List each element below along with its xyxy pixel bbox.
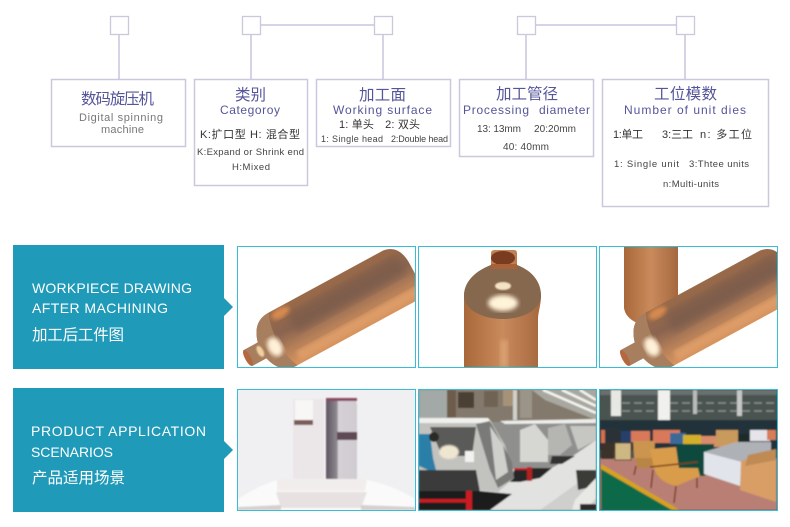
side table and cream box (601, 443, 614, 459)
text: unit codes: n: 多工位 (700, 127, 752, 141)
text: unit codes in English: 3:Thtee units (689, 159, 749, 170)
node square 3 (374, 16, 392, 34)
text: unit codes: 3:三工 (662, 129, 693, 141)
panel: working surface (316, 80, 450, 146)
subheading: Number of unit dies: Number of unit dies (624, 103, 746, 117)
tan sofa (740, 458, 776, 502)
heading: processing diameter: 加工管径 (496, 85, 558, 103)
far cars (500, 420, 596, 470)
near car (419, 418, 514, 492)
text: unit codes in English: 1: Single unit (614, 159, 679, 170)
text: product application scenarios: PRODUCT APPLICATION (31, 423, 206, 439)
image: two copper tubes (599, 246, 778, 368)
subheading: Processing diameter (463, 103, 590, 117)
text: machine name in English: machine (101, 124, 144, 136)
text: unit codes (613, 127, 752, 141)
heading: machine name: 数码旋压机 (81, 90, 154, 108)
image: air conditioners (238, 390, 416, 510)
panel: workpiece drawing label (13, 245, 233, 369)
white sofa (702, 448, 742, 487)
node square 4 (518, 16, 536, 34)
panel: processing diameter (460, 80, 594, 156)
armchair one (633, 441, 655, 458)
text: unit codes in English (614, 159, 749, 190)
text: product application in Chinese: 产品适用场景 (32, 469, 125, 487)
text: product application scenarios (31, 423, 206, 460)
text: workpiece drawing in Chinese: 加工后工件图 (32, 326, 124, 344)
text: diameter values: 13: 13mm (477, 124, 521, 135)
subheading: Processing diameter: Processing (463, 103, 529, 117)
text: head codes in English: 1: Single head (321, 134, 383, 144)
heading: number of unit dies: 工位模数 (654, 85, 717, 103)
text: unit codes: 1:单工 (613, 128, 643, 141)
image: copper tube angled (237, 246, 416, 368)
node square 5 (676, 16, 694, 34)
foreground shadow and red stands (419, 491, 512, 510)
text: head codes in English: 2:Double head (391, 134, 448, 144)
text: workpiece drawing: WORKPIECE DRAWING (32, 280, 192, 296)
subheading: Working surface: Working surface (333, 103, 432, 117)
connector lines (119, 25, 685, 79)
text: category codes: K:扩口型 H: 混合型 (200, 127, 300, 141)
text: category codes in English: H:Mixed (232, 162, 270, 173)
text: machine name in English: Digital spinning (79, 112, 163, 124)
heading: category: 类别 (235, 86, 266, 104)
subheading: Categoroy: Categoroy (220, 103, 280, 117)
text: workpiece drawing: AFTER MACHINING (32, 300, 168, 316)
text: category codes in English (197, 147, 304, 173)
subheading: Processing diameter: diameter (539, 103, 590, 117)
floor (600, 458, 777, 510)
image: furniture factory (600, 390, 778, 510)
armchair two (650, 447, 679, 468)
text: unit codes in English: n:Multi-units (663, 179, 719, 190)
text: diameter values (477, 124, 576, 153)
text: head codes in English (321, 134, 448, 144)
back row of sofas (601, 430, 605, 443)
panel: category (194, 80, 308, 186)
floor (478, 440, 596, 510)
factory backdrop (456, 390, 592, 422)
text: category codes in English: K:Expand or Shrink end (197, 147, 304, 158)
heading: working surface: 加工面 (359, 86, 406, 104)
text: machine name in English (79, 112, 163, 136)
image: copper tube upright (418, 246, 596, 368)
text: diameter values: 20:20mm (534, 124, 576, 135)
machinery lower right (576, 470, 596, 490)
worker (419, 434, 436, 470)
panel: number of unit dies (602, 80, 768, 206)
ceiling (610, 395, 743, 420)
text: product application scenarios: SCENARIOS (31, 444, 113, 460)
text: head codes: 1: 单头 2: 双头 (339, 118, 420, 131)
panel: product application label (13, 388, 233, 512)
node square 1 (110, 16, 128, 34)
panel: digital spinning machine (52, 80, 186, 146)
text: workpiece drawing (32, 280, 192, 316)
floor shadows (510, 468, 552, 482)
green sofa (677, 444, 714, 476)
node square 2 (242, 16, 260, 34)
text: diameter values: 40: 40mm (503, 142, 549, 153)
image: car assembly line (418, 390, 596, 510)
